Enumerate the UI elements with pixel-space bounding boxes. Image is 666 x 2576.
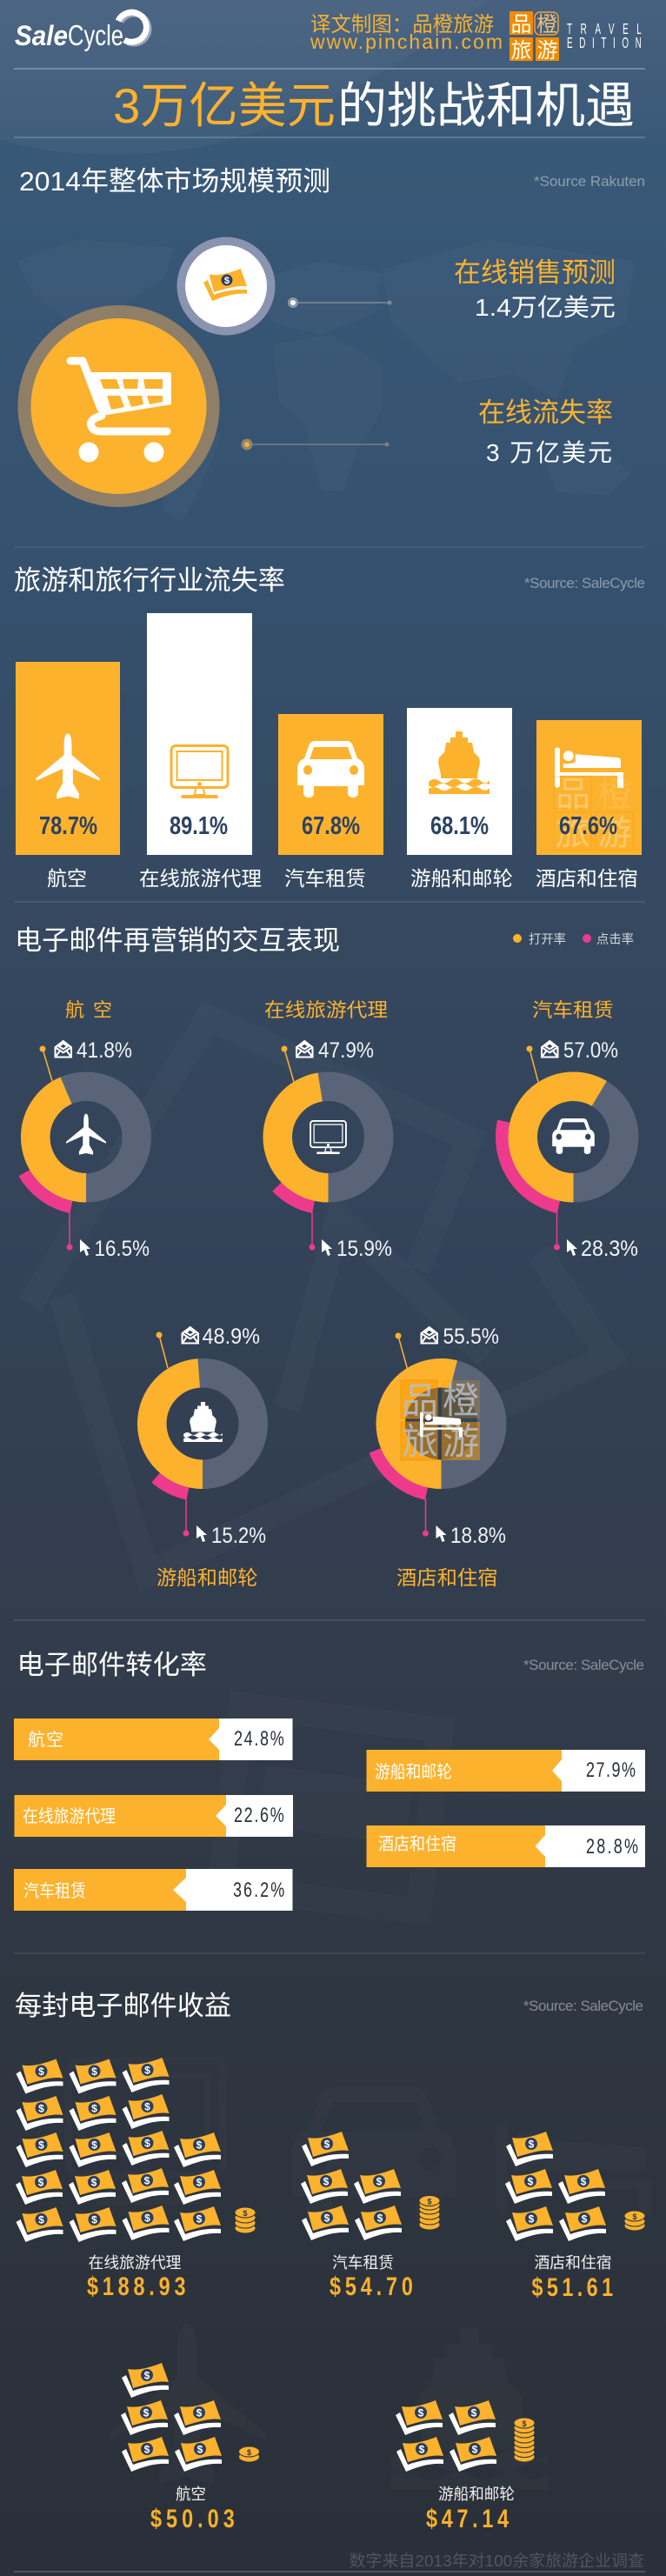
header: 品橙旅游 logo: 旅 — [511, 39, 532, 63]
donut: airline: 41.8% — [77, 1038, 132, 1063]
conversion bar: hotels and accommodation: 酒店和住宿 — [378, 1834, 456, 1854]
header: 品橙旅游 logo: 游 — [537, 39, 558, 63]
bar: cruises and ferries: 游船和邮轮 — [410, 867, 513, 890]
legend — [513, 932, 634, 947]
heading: market forecast: 2014年整体市场规模预测 — [19, 166, 330, 197]
header: travel edition: EDITION — [567, 35, 642, 52]
revenue: car rental: 汽车租赁 — [332, 2254, 394, 2272]
donut: online travel agency — [257, 999, 400, 1261]
heading: abandonment by sector: 旅游和旅行行业流失率 — [14, 565, 285, 596]
forecast: online sales: 1.4万亿美元 — [475, 294, 616, 321]
world map background — [17, 239, 635, 522]
conversion bar: online travel agency — [14, 1795, 293, 1837]
conversion bar: airline — [14, 1718, 292, 1760]
bar: hotels and accommodation: 酒店和住宿 — [536, 867, 638, 890]
header: translator credit: www.pinchain.com — [310, 30, 503, 53]
bar: online travel agency — [139, 613, 262, 890]
conversion bar: car rental — [14, 1869, 292, 1911]
forecast: online sales — [454, 257, 616, 321]
decorative email section background arrows — [30, 1018, 609, 1574]
conversion bar: hotels and accommodation — [367, 1825, 645, 1867]
conversion bar: airline: 24.8% — [234, 1728, 284, 1751]
header: travel edition: TRAVEL — [567, 21, 642, 38]
conversion bar: cruises and ferries — [367, 1750, 645, 1792]
donut: car rental: 57.0% — [563, 1038, 618, 1063]
footer note: 数字来自2013年对100余家旅游企业调查 — [350, 2552, 644, 2570]
forecast: online sales: 在线销售预测 — [454, 257, 616, 288]
header: 品橙旅游 logo: 橙 — [536, 13, 557, 37]
legend: 点击率 — [596, 932, 634, 947]
conversion bar: cruises and ferries: 游船和邮轮 — [375, 1762, 452, 1782]
revenue: car rental: $ — [427, 2197, 432, 2206]
forecast: online abandonment — [478, 397, 613, 466]
donut: car rental: 28.3% — [581, 1237, 638, 1261]
bar: hotels and accommodation: 旅 — [556, 814, 590, 852]
legend: 打开率 — [529, 932, 566, 947]
donut: airline: 航 空 — [65, 999, 112, 1021]
revenue: hotels and accommodation — [505, 2132, 645, 2302]
conversion bar: cruises and ferries: 27.9% — [586, 1759, 636, 1782]
header: 品橙旅游 logo: 品 — [511, 13, 532, 37]
bar: car rental: 67.8% — [302, 812, 360, 840]
header: SaleCycle logo — [15, 12, 149, 51]
forecast: online abandonment: 3 万亿美元 — [486, 439, 612, 466]
heading: email remarketing engagement: 电子邮件再营销的交互表现 — [15, 925, 340, 956]
heading: email conversion: 电子邮件转化率 — [17, 1650, 207, 1680]
donut: cruises and ferries: 48.9% — [202, 1325, 260, 1349]
main title — [113, 78, 635, 133]
bar: online travel agency: 89.1% — [170, 812, 228, 840]
donut: cruises and ferries: 15.2% — [211, 1524, 266, 1548]
forecast: online abandonment: 在线流失率 — [478, 397, 613, 428]
bar: car rental — [278, 714, 383, 890]
revenue: online travel agency: 在线旅游代理 — [89, 2254, 181, 2272]
header: SaleCycle logo: Cycle — [68, 19, 123, 51]
revenue: airline: $50.03 — [150, 2504, 235, 2533]
revenue: airline: 航空 — [176, 2486, 206, 2503]
decorative revenue section icon ghosts — [68, 2060, 652, 2490]
donut: cruises and ferries: 游船和邮轮 — [157, 1566, 257, 1589]
revenue: online travel agency: $ — [243, 2209, 248, 2218]
donut: cruises and ferries — [131, 1325, 274, 1589]
donut: hotels and accommodation: 旅 — [402, 1421, 438, 1462]
donut: airline: 16.5% — [94, 1237, 150, 1261]
conversion bar: hotels and accommodation: 28.8% — [586, 1836, 638, 1859]
header: 品橙旅游 logo — [509, 11, 559, 63]
main title: 3万亿美元 — [113, 78, 336, 133]
revenue: hotels and accommodation: $51.61 — [532, 2272, 613, 2302]
donut: airline — [15, 999, 157, 1261]
bar: cruises and ferries — [407, 708, 513, 890]
donut: online travel agency: 47.9% — [318, 1038, 374, 1063]
bar: hotels and accommodation: 67.6% — [559, 812, 617, 840]
connector: sales — [288, 297, 391, 308]
money circle — [177, 237, 275, 336]
decorative calculator background — [205, 1691, 456, 1925]
revenue: cruises and ferries — [396, 2400, 535, 2533]
donut: hotels and accommodation — [370, 1325, 513, 1589]
donut: car rental — [503, 999, 645, 1261]
revenue: online travel agency: $188.93 — [87, 2272, 185, 2301]
donut: hotels and accommodation: 55.5% — [443, 1325, 499, 1349]
revenue: airline: $ — [247, 2448, 251, 2457]
donut: online travel agency: 15.9% — [336, 1237, 392, 1261]
revenue: online travel agency — [16, 2058, 256, 2301]
donut: hotels and accommodation: 游 — [443, 1421, 479, 1462]
conversion bar: online travel agency: 22.6% — [234, 1805, 284, 1827]
shopping cart circle — [17, 305, 219, 507]
conversion bar: online travel agency: 在线旅游代理 — [23, 1806, 116, 1826]
bar: hotels and accommodation: 品 — [556, 776, 590, 814]
connector: abandonment — [242, 438, 390, 450]
donut: hotels and accommodation: 橙 — [443, 1380, 479, 1421]
source: SaleCycle: *Source: SaleCycle — [523, 1998, 643, 2014]
source: SaleCycle: *Source: SaleCycle — [524, 575, 645, 591]
donut: hotels and accommodation: 品 — [402, 1380, 438, 1421]
donut: online travel agency: 在线旅游代理 — [264, 999, 388, 1021]
revenue: airline — [121, 2363, 259, 2533]
donut: hotels and accommodation: 酒店和住宿 — [396, 1566, 497, 1589]
bar: airline — [16, 662, 120, 890]
bar: hotels and accommodation: 游 — [597, 814, 632, 852]
revenue: hotels and accommodation: 酒店和住宿 — [534, 2254, 612, 2272]
bar: hotels and accommodation: 橙 — [597, 776, 632, 814]
conversion bar: car rental: 36.2% — [233, 1879, 284, 1902]
bar: airline: 航空 — [47, 867, 87, 890]
revenue: car rental: $54.70 — [330, 2272, 413, 2301]
header: translator credit — [310, 13, 503, 53]
source: SaleCycle: *Source: SaleCycle — [523, 1657, 644, 1673]
conversion bar: airline: 航 空 — [28, 1730, 63, 1750]
source: Rakuten: *Source Rakuten — [534, 173, 645, 190]
revenue: cruises and ferries: $ — [522, 2419, 527, 2428]
heading: revenue per email: 每封电子邮件收益 — [15, 1991, 231, 2021]
main title: 的挑战和机遇 — [337, 78, 635, 133]
revenue: cruises and ferries: $47.14 — [426, 2504, 509, 2533]
revenue: car rental — [301, 2132, 440, 2301]
bar: cruises and ferries: 68.1% — [430, 812, 489, 840]
header: translator credit: 译文制图：品橙旅游 — [310, 13, 494, 37]
decorative top swoosh — [0, 0, 487, 155]
bar: online travel agency: 在线旅游代理 — [139, 867, 262, 890]
donut: hotels and accommodation: 18.8% — [450, 1524, 506, 1548]
header: travel edition — [567, 21, 642, 52]
bar: hotels and accommodation — [536, 720, 642, 890]
bar: airline: 78.7% — [39, 812, 97, 840]
header: SaleCycle logo: Sale — [15, 20, 68, 51]
revenue: cruises and ferries: 游船和邮轮 — [438, 2486, 515, 2503]
donut: car rental: 汽车租赁 — [532, 999, 614, 1021]
bar: car rental: 汽车租赁 — [284, 867, 366, 890]
conversion bar: car rental: 汽车租赁 — [23, 1881, 86, 1901]
revenue: hotels and accommodation: $ — [632, 2212, 637, 2221]
